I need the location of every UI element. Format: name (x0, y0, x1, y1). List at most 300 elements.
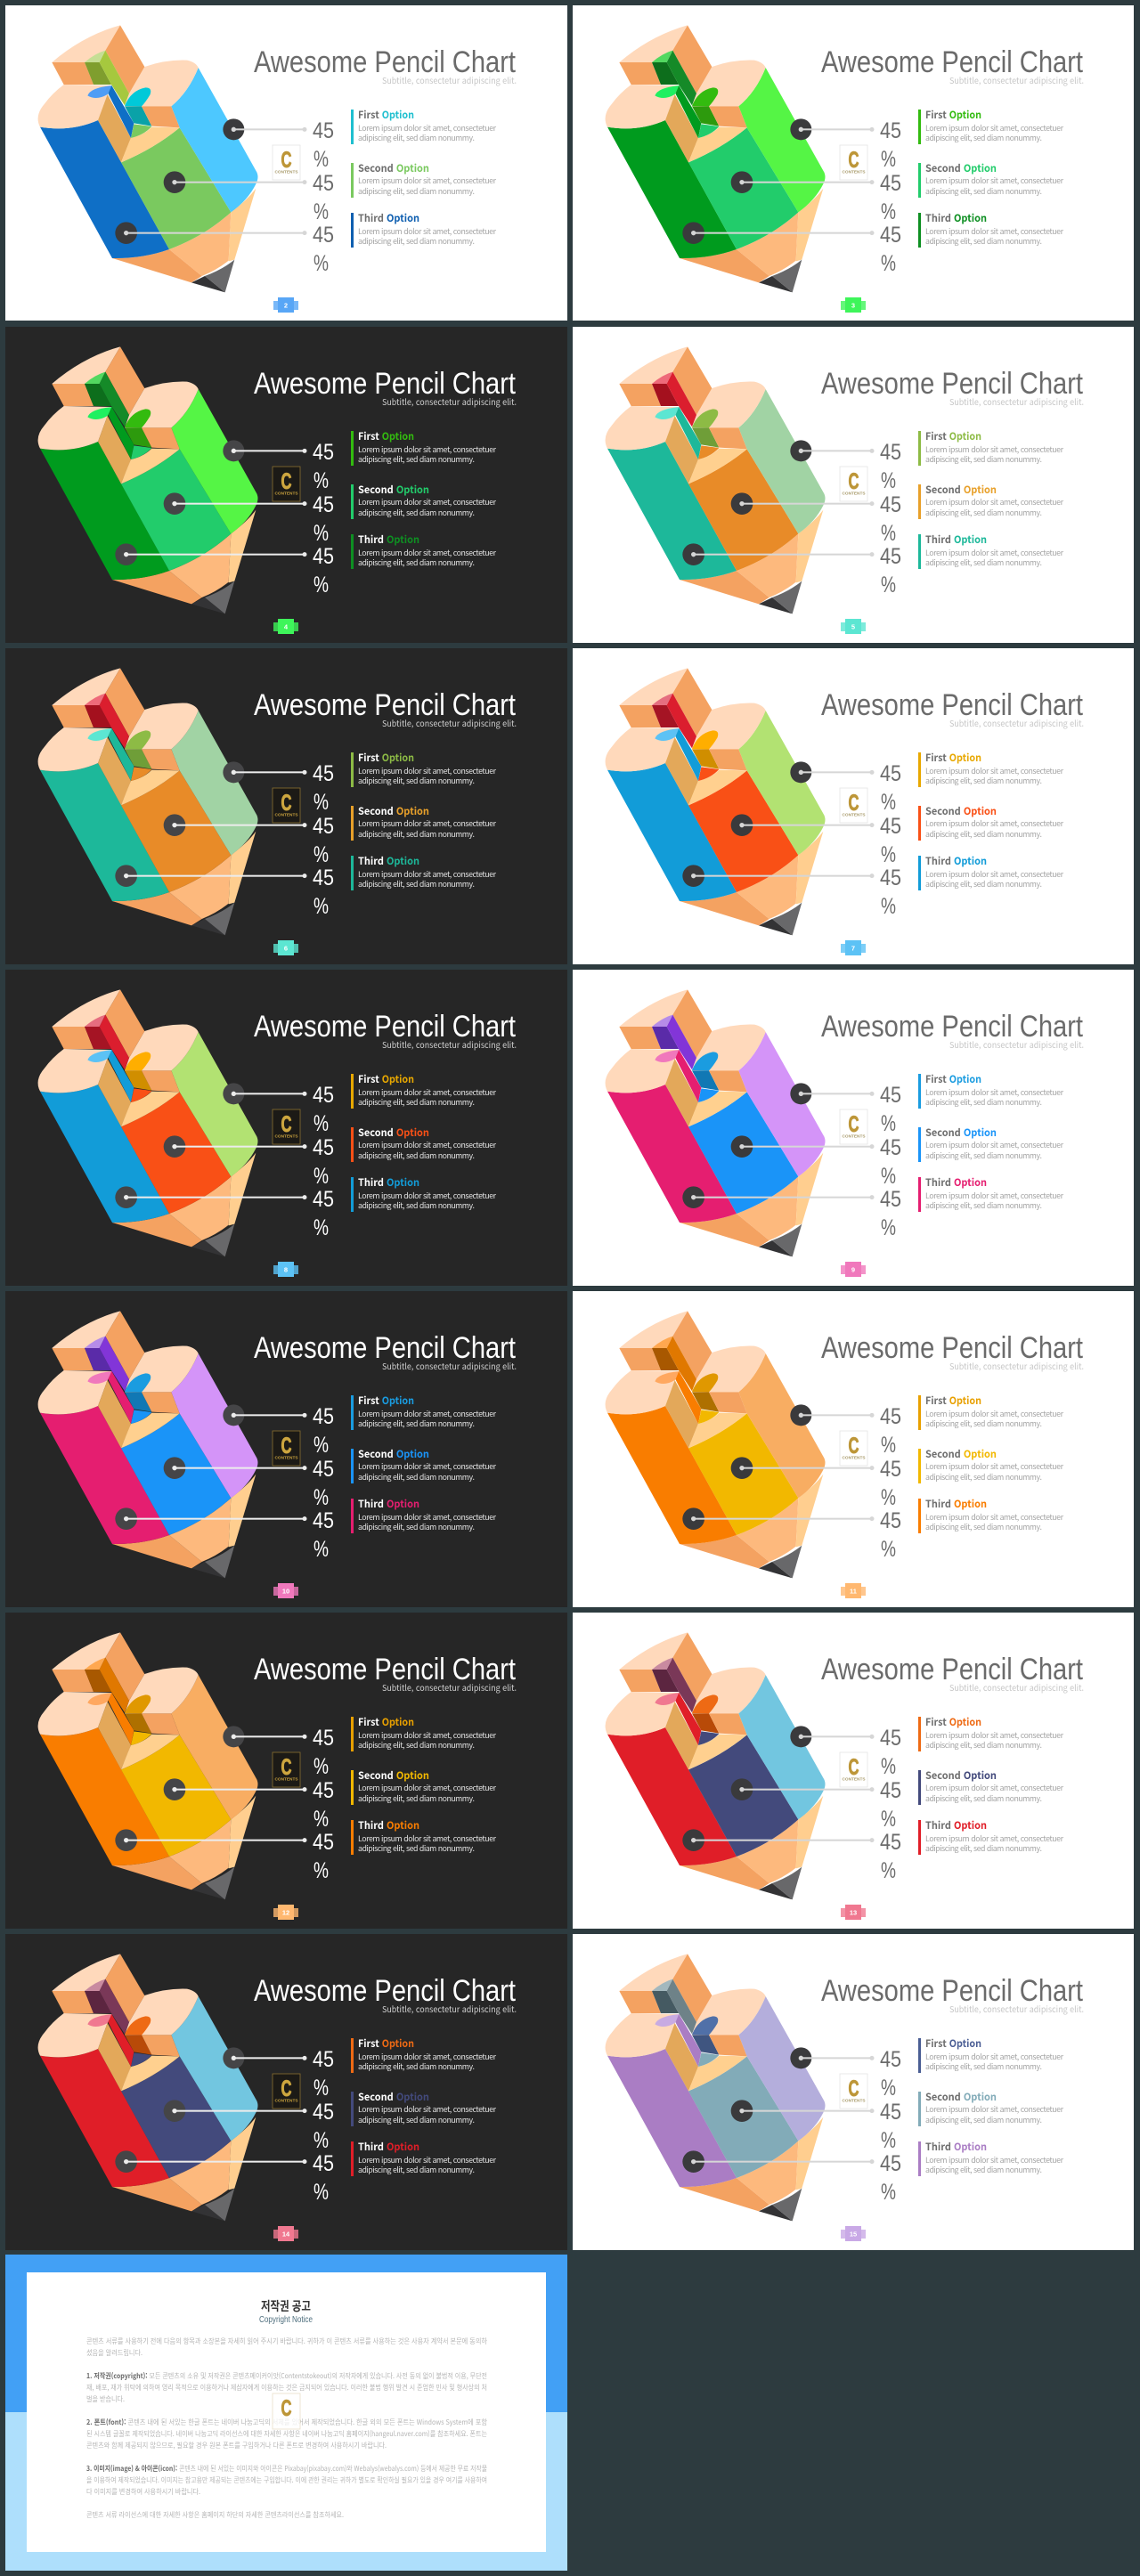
values: % (881, 1215, 896, 1240)
logo: C (281, 791, 292, 816)
option: first: Lorem ipsum dolor sit amet, consectetuer (358, 765, 497, 776)
option: third: Third Option (925, 1818, 987, 1832)
values: % (314, 1215, 329, 1240)
option: first: First Option (358, 108, 414, 122)
values: % (881, 1807, 896, 1832)
title: Awesome Pencil Chart (821, 688, 1083, 722)
option: third: adipiscing elit, sed diam nonummy. (358, 1521, 475, 1532)
panel: notice card (27, 2272, 546, 2552)
subtitle: Subtitle, consectetur adipiscing elit. (949, 1681, 1084, 1694)
option: first: adipiscing elit, sed diam nonummy. (358, 775, 475, 786)
values: % (881, 521, 896, 546)
option: third (918, 532, 1064, 569)
logo: CONTENTS (274, 2098, 298, 2103)
pencil chart (606, 989, 874, 1256)
values: % (314, 521, 329, 546)
option: second: Lorem ipsum dolor sit amet, consectetuer (358, 1139, 497, 1150)
option: third (351, 854, 497, 890)
option: first: Lorem ipsum dolor sit amet, consectetuer (358, 443, 497, 455)
option: second (351, 1768, 497, 1805)
values (880, 118, 901, 276)
option: first: First Option (358, 1394, 414, 1408)
option: second: Lorem ipsum dolor sit amet, consectetuer (925, 175, 1064, 186)
option: second: Lorem ipsum dolor sit amet, consectetuer (925, 1460, 1064, 1472)
option: third (351, 211, 497, 248)
slide 2: blue light (5, 5, 567, 321)
title: Awesome Pencil Chart (254, 1974, 516, 2008)
title: Awesome Pencil Chart (821, 1653, 1083, 1686)
page number: 11 (850, 1587, 857, 1596)
values: 45 (313, 223, 334, 248)
values: % (314, 842, 329, 867)
option: first: First Option (925, 751, 981, 765)
notice body text: 3. 이미지(image) & 아이콘(icon): 콘텐츠 내에 된 서있는 이미지와 아이콘은 Pixabay(pixabay.com)와 Webalys(webalys.com) 등에서 제공한 무료 저작물 (86, 2464, 487, 2474)
option: third: adipiscing elit, sed diam nonummy. (925, 235, 1042, 247)
values: 45 (313, 1187, 334, 1212)
values (313, 761, 334, 919)
logo: CONTENTS (843, 1455, 866, 1460)
values: % (314, 1754, 329, 1779)
pencil chart (606, 25, 874, 292)
page number: 6 (284, 944, 288, 953)
notice body text: 2. 폰트(font): 콘텐츠 내에 된 서있는 한글 폰트는 네이버 나눔고딕의 서체를 있어서 제작되었습니다. 한글 외의 모든 폰트는 Windows System에 포함 (86, 2418, 487, 2427)
option: third (918, 1818, 1064, 1855)
values (880, 440, 901, 597)
option: second: adipiscing elit, sed diam nonummy. (358, 828, 475, 840)
option: third: Third Option (358, 1175, 419, 1190)
option: first (918, 1072, 1064, 1109)
option: third (351, 1175, 497, 1212)
logo: CONTENTS (274, 492, 298, 497)
logo: CONTENTS (843, 2098, 866, 2103)
page number: 12 (282, 1909, 289, 1916)
option: first: adipiscing elit, sed diam nonummy. (358, 1418, 475, 1429)
option: third: adipiscing elit, sed diam nonummy. (358, 1842, 475, 1854)
option: second: Second Option (925, 1768, 997, 1783)
values: 45 (880, 814, 901, 839)
option: third (918, 854, 1064, 890)
page number: 10 (282, 1587, 289, 1596)
pencil chart (38, 1311, 306, 1578)
slide 9: pink light (573, 970, 1134, 1286)
title: Awesome Pencil Chart (254, 688, 516, 722)
page number: 9 (851, 1266, 855, 1273)
heading: 저작권 공고 (261, 2299, 311, 2313)
option: third: adipiscing elit, sed diam nonummy. (358, 878, 475, 890)
option: second: Lorem ipsum dolor sit amet, consectetuer (925, 817, 1064, 829)
values (313, 440, 334, 597)
values: 45 (313, 440, 334, 465)
values: 45 (313, 2100, 334, 2125)
logo: C (281, 1434, 292, 1459)
values: % (314, 147, 329, 172)
values: 45 (313, 761, 334, 786)
values: % (314, 2076, 329, 2101)
logo (273, 1109, 300, 1144)
values: 45 (880, 492, 901, 517)
values (880, 2047, 901, 2205)
page number (273, 297, 298, 313)
notice body text: 콘텐츠와 함께 제공되지 않으므로, 필요할 경우 원본 폰트를 구입하거나 다른 폰트로 변경하여 사용하시기 바랍니다. (86, 2441, 387, 2450)
option: second: Lorem ipsum dolor sit amet, consectetuer (925, 496, 1064, 508)
values: 45 (880, 1508, 901, 1533)
option: third: Lorem ipsum dolor sit amet, consectetuer (925, 547, 1064, 558)
title: Awesome Pencil Chart (821, 45, 1083, 79)
option: second: Second Option (358, 483, 429, 497)
option: second: Lorem ipsum dolor sit amet, consectetuer (925, 1139, 1064, 1150)
values: 45 (880, 865, 901, 890)
logo (840, 1109, 867, 1144)
option: third: Third Option (925, 1175, 987, 1190)
values: % (314, 199, 329, 224)
pencil chart (606, 668, 874, 935)
option: third: Lorem ipsum dolor sit amet, consectetuer (358, 2154, 497, 2166)
pencil chart (38, 1954, 306, 2221)
values: % (314, 2128, 329, 2153)
values: 45 (313, 1726, 334, 1751)
values: 45 (313, 171, 334, 196)
values (880, 1726, 901, 1883)
values (313, 118, 334, 276)
option: first: Lorem ipsum dolor sit amet, consectetuer (925, 443, 1064, 455)
option: third: Third Option (925, 2140, 987, 2154)
subtitle: Subtitle, consectetur adipiscing elit. (382, 1360, 517, 1372)
values: % (881, 1754, 896, 1779)
subtitle: Subtitle, consectetur adipiscing elit. (949, 2003, 1084, 2015)
values: 45 (880, 1404, 901, 1429)
option: second: adipiscing elit, sed diam nonummy. (925, 1471, 1042, 1483)
logo: C (281, 2396, 292, 2421)
option: second: Lorem ipsum dolor sit amet, consectetuer (358, 1460, 497, 1472)
values: % (314, 468, 329, 493)
option: first: First Option (925, 1715, 981, 1729)
option: second (351, 1125, 497, 1162)
logo: CONTENTS (843, 1777, 866, 1783)
option: second (918, 483, 1064, 519)
values: % (881, 1433, 896, 1458)
logo: CONTENTS (843, 812, 866, 817)
option: second: adipiscing elit, sed diam nonummy. (925, 185, 1042, 197)
notice body text: 다 이미지를 변경하여 사용하시기 바랍니다. (86, 2487, 200, 2497)
page number (273, 619, 298, 634)
notice body text: 콘텐츠 서류 라이선스에 대한 자세한 사항은 홈페이지 하단의 자세한 콘텐츠라이선스를 참조하세요. (86, 2510, 344, 2520)
option: second: adipiscing elit, sed diam nonummy. (358, 1471, 475, 1483)
page number: 7 (851, 944, 855, 953)
option: second: Second Option (925, 2090, 997, 2104)
option: second: Second Option (925, 804, 997, 818)
logo (273, 1431, 300, 1466)
option: second: Second Option (925, 1447, 997, 1461)
option: first: adipiscing elit, sed diam nonummy. (358, 1739, 475, 1751)
page number: 15 (850, 2230, 857, 2239)
option: third: Third Option (358, 2140, 419, 2154)
title: Awesome Pencil Chart (254, 45, 516, 79)
logo: CONTENTS (274, 169, 298, 175)
option: first: adipiscing elit, sed diam nonummy. (925, 1418, 1042, 1429)
option: second: Lorem ipsum dolor sit amet, consectetuer (358, 175, 497, 186)
option: second: Second Option (358, 161, 429, 175)
option: third: adipiscing elit, sed diam nonummy. (925, 1521, 1042, 1532)
values: % (881, 1537, 896, 1562)
option: third (351, 1818, 497, 1855)
option: third: Third Option (358, 1497, 419, 1511)
values: % (881, 1164, 896, 1189)
values: % (314, 251, 329, 276)
option: first (351, 751, 497, 787)
logo (840, 1752, 867, 1787)
notice body text: 을 이용하여 제작되었습니다. 이미지는 참고용만 제공되는 콘텐츠에는 구입합니다. 이에 관한 권리는 귀하가 별도로 확인하실 필요가 있을 경우 여기를 사용하여 (86, 2475, 487, 2485)
option: second (918, 1125, 1064, 1162)
values (313, 2047, 334, 2205)
page number (841, 1262, 866, 1277)
option: first (351, 429, 497, 466)
page number: 14 (282, 2230, 290, 2239)
option: third: Lorem ipsum dolor sit amet, consectetuer (358, 1511, 497, 1523)
option: third: Lorem ipsum dolor sit amet, consectetuer (925, 1190, 1064, 1201)
values (313, 1404, 334, 1562)
option: second (918, 161, 1064, 198)
subtitle: Subtitle, consectetur adipiscing elit. (949, 395, 1084, 408)
option: third: adipiscing elit, sed diam nonummy. (925, 1842, 1042, 1854)
notice body text: 셨음을 알려드립니다. (86, 2348, 142, 2358)
logo: CONTENTS (274, 1777, 298, 1783)
logo: C (848, 791, 859, 816)
values: 45 (313, 492, 334, 517)
option: first: adipiscing elit, sed diam nonummy. (358, 453, 475, 465)
option: third: Lorem ipsum dolor sit amet, consectetuer (358, 225, 497, 237)
values: % (881, 894, 896, 919)
option: third: adipiscing elit, sed diam nonummy. (358, 2164, 475, 2175)
title: Awesome Pencil Chart (254, 1653, 516, 1686)
values: % (314, 1164, 329, 1189)
title: Awesome Pencil Chart (254, 367, 516, 401)
values: 45 (313, 1457, 334, 1482)
values: % (314, 894, 329, 919)
option: first: adipiscing elit, sed diam nonummy. (925, 775, 1042, 786)
option: first: First Option (358, 429, 414, 443)
values (880, 1404, 901, 1562)
logo: C (848, 1112, 859, 1137)
subtitle: Subtitle, consectetur adipiscing elit. (949, 717, 1084, 729)
option: first: Lorem ipsum dolor sit amet, consectetuer (925, 765, 1064, 776)
values: 45 (313, 865, 334, 890)
slide 8: sky dark (5, 970, 567, 1286)
slide 6: teal dark (5, 648, 567, 964)
option: first: adipiscing elit, sed diam nonummy. (925, 1096, 1042, 1108)
slide 14: navy dark (5, 1934, 567, 2250)
page number: 13 (850, 1909, 857, 1916)
option: third: Third Option (925, 532, 987, 547)
logo: CONTENTS (274, 1455, 298, 1460)
option: first: First Option (925, 1072, 981, 1086)
logo: C (848, 469, 859, 494)
subtitle: Subtitle, consectetur adipiscing elit. (382, 1681, 517, 1694)
option: first: adipiscing elit, sed diam nonummy. (925, 1739, 1042, 1751)
values: % (881, 842, 896, 867)
option: first (351, 2036, 497, 2073)
logo (273, 2074, 300, 2109)
option: second: Second Option (358, 804, 429, 818)
logo (273, 145, 300, 180)
logo (840, 145, 867, 180)
logo: CONTENTS (843, 492, 866, 497)
option: third: Third Option (358, 854, 419, 868)
option: third: adipiscing elit, sed diam nonummy. (925, 1199, 1042, 1211)
title: Awesome Pencil Chart (821, 1010, 1083, 1044)
values: 45 (313, 1778, 334, 1803)
logo: CONTENTS (274, 812, 298, 817)
values: % (881, 2128, 896, 2153)
logo: C (281, 2076, 292, 2101)
option: first: Lorem ipsum dolor sit amet, consectetuer (358, 1408, 497, 1419)
option: third: Lorem ipsum dolor sit amet, consectetuer (925, 1511, 1064, 1523)
values: 45 (880, 171, 901, 196)
option: first: First Option (925, 1394, 981, 1408)
option: second (351, 2090, 497, 2126)
slide 10: pink dark (5, 1291, 567, 1607)
notice body text: 벌을 받습니다. (86, 2394, 125, 2404)
logo: C (281, 1112, 292, 1137)
option: first: First Option (358, 1715, 414, 1729)
option: third: Lorem ipsum dolor sit amet, consectetuer (925, 2154, 1064, 2166)
option: third: adipiscing elit, sed diam nonummy. (358, 235, 475, 247)
option: third: Lorem ipsum dolor sit amet, consectetuer (925, 868, 1064, 880)
values: % (881, 1111, 896, 1136)
option: third: Lorem ipsum dolor sit amet, consectetuer (358, 868, 497, 880)
option: first: adipiscing elit, sed diam nonummy. (358, 1096, 475, 1108)
option: third: adipiscing elit, sed diam nonummy. (358, 1199, 475, 1211)
values: % (314, 790, 329, 815)
subtitle: Subtitle, consectetur adipiscing elit. (382, 2003, 517, 2015)
option: first: First Option (358, 751, 414, 765)
option: third (918, 1175, 1064, 1212)
option: third (351, 1497, 497, 1533)
option: first (351, 1715, 497, 1751)
page number (273, 2226, 298, 2241)
subtitle: Subtitle, consectetur adipiscing elit. (949, 1038, 1084, 1051)
subtitle: Subtitle, consectetur adipiscing elit. (382, 74, 517, 86)
option: second: Second Option (925, 483, 997, 497)
values: 45 (880, 544, 901, 569)
logo: CONTENTS (843, 169, 866, 175)
values: % (881, 2076, 896, 2101)
page number (273, 1905, 298, 1920)
values: 45 (880, 2100, 901, 2125)
values: % (881, 1858, 896, 1883)
values: 45 (880, 2151, 901, 2176)
values: 45 (880, 2047, 901, 2072)
values: % (314, 2180, 329, 2205)
option: first: First Option (925, 429, 981, 443)
option: second: Lorem ipsum dolor sit amet, consectetuer (358, 496, 497, 508)
values: 45 (880, 118, 901, 143)
logo (273, 467, 300, 501)
option: second: Second Option (925, 1125, 997, 1140)
pencil chart (606, 1632, 874, 1899)
option: third: Lorem ipsum dolor sit amet, consectetuer (358, 547, 497, 558)
slide 13: navy light (573, 1613, 1134, 1929)
sub heading: Copyright Notice (259, 2315, 313, 2325)
title: Awesome Pencil Chart (821, 1974, 1083, 2008)
option: second: adipiscing elit, sed diam nonummy. (358, 1792, 475, 1804)
option: third: adipiscing elit, sed diam nonummy. (925, 2164, 1042, 2175)
values: % (314, 573, 329, 597)
values: % (314, 1111, 329, 1136)
page number: 3 (851, 301, 855, 310)
option: first (918, 108, 1064, 144)
notice body text: 콘텐츠 서류를 사용하기 전에 다음의 항목과 소장본을 자세히 읽어 주시기 바랍니다. 귀하가 이 콘텐츠 서류를 사용하는 것은 사용자 계약서 본문에 동의하 (86, 2336, 488, 2346)
option: third (918, 1497, 1064, 1533)
values: 45 (313, 2151, 334, 2176)
values: 45 (880, 1457, 901, 1482)
pencil chart (606, 1311, 874, 1578)
option: second: Lorem ipsum dolor sit amet, consectetuer (925, 2103, 1064, 2115)
values: 45 (880, 1778, 901, 1803)
logo: C (848, 2076, 859, 2101)
title: Awesome Pencil Chart (254, 1331, 516, 1365)
slide 11: orange light (573, 1291, 1134, 1607)
values: 45 (880, 1830, 901, 1855)
slide 4: green dark (5, 327, 567, 643)
values: % (314, 1433, 329, 1458)
slide: copyright notice (5, 2255, 567, 2571)
option: first: Lorem ipsum dolor sit amet, consectetuer (358, 2051, 497, 2062)
values: % (314, 1537, 329, 1562)
option: second (351, 483, 497, 519)
page number (841, 297, 866, 313)
option: second: adipiscing elit, sed diam nonummy. (925, 828, 1042, 840)
option: third: Third Option (358, 532, 419, 547)
option: third: Third Option (925, 1497, 987, 1511)
option: first (351, 108, 497, 144)
option: first: Lorem ipsum dolor sit amet, consectetuer (925, 1086, 1064, 1098)
option: first (351, 1394, 497, 1430)
option: first: First Option (925, 108, 981, 122)
option: first (918, 2036, 1064, 2073)
option: second: adipiscing elit, sed diam nonummy. (358, 507, 475, 518)
values: % (881, 2180, 896, 2205)
values: 45 (313, 2047, 334, 2072)
page number: 8 (284, 1266, 288, 1273)
logo (273, 1752, 300, 1787)
values: 45 (880, 223, 901, 248)
option: second: Second Option (358, 1447, 429, 1461)
page number (841, 1905, 866, 1920)
option: second (918, 1447, 1064, 1483)
logo: C (281, 148, 292, 173)
option: first: Lorem ipsum dolor sit amet, consectetuer (358, 1086, 497, 1098)
option: second: Second Option (925, 161, 997, 175)
option: second: adipiscing elit, sed diam nonummy. (358, 1150, 475, 1161)
values: 45 (313, 1508, 334, 1533)
values: 45 (313, 544, 334, 569)
option: second: Second Option (358, 1768, 429, 1783)
option: third: Third Option (358, 1818, 419, 1832)
option: first (918, 1394, 1064, 1430)
pencil chart (38, 989, 306, 1256)
title: Awesome Pencil Chart (821, 367, 1083, 401)
option: third (918, 211, 1064, 248)
values: 45 (880, 1726, 901, 1751)
subtitle: Subtitle, consectetur adipiscing elit. (949, 1360, 1084, 1372)
values: 45 (880, 440, 901, 465)
page number (273, 1262, 298, 1277)
values: % (881, 199, 896, 224)
page number (273, 940, 298, 955)
option: first: Lorem ipsum dolor sit amet, consectetuer (358, 1729, 497, 1741)
option: first (918, 751, 1064, 787)
values: % (314, 1485, 329, 1510)
